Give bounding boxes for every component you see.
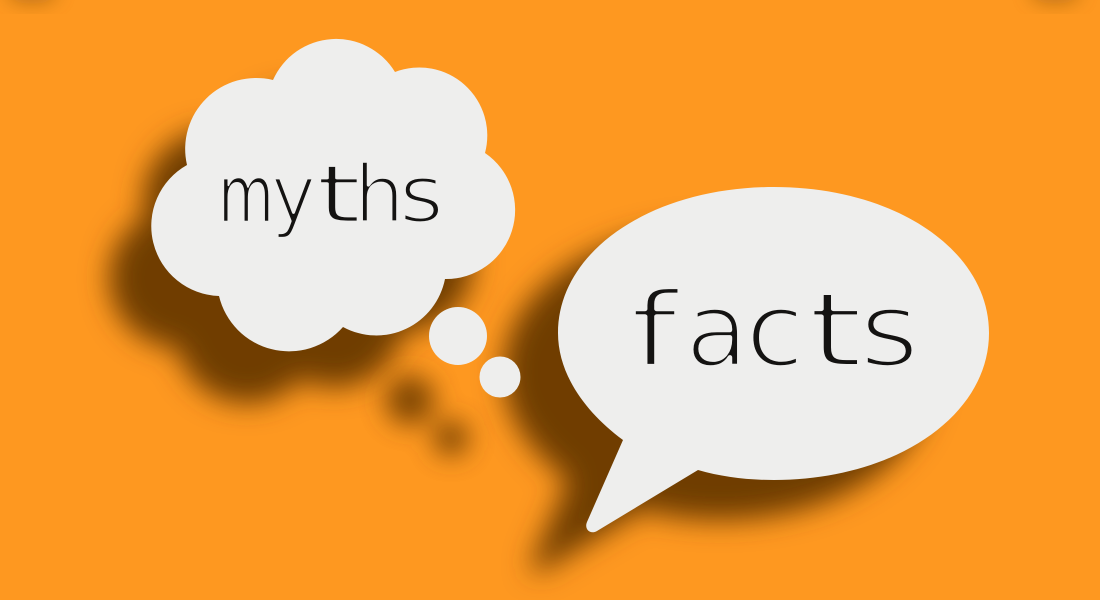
facts speech bubble: [558, 187, 989, 532]
myths label: [218, 148, 444, 242]
myths thought cloud: [151, 39, 515, 351]
myths label: y: [271, 149, 316, 241]
facts label: a: [685, 269, 749, 391]
myths label: m: [218, 149, 274, 242]
large thought dot: [429, 307, 487, 365]
cloud shape: [151, 39, 515, 351]
facts label: f: [630, 270, 680, 391]
myths label: s: [399, 148, 444, 241]
facts label: [630, 269, 920, 391]
speech bubble shape: [558, 187, 989, 532]
corner shadows: [6, 0, 1081, 4]
small thought dot: [480, 356, 520, 398]
myths label: t: [316, 149, 361, 241]
myths label: h: [354, 148, 405, 241]
cloud shadow: [109, 91, 473, 403]
speech bubble shadow: [503, 227, 934, 572]
facts label: c: [745, 270, 805, 391]
facts label: t: [808, 270, 863, 391]
small bubble shadows: [385, 375, 469, 456]
facts label: s: [859, 271, 920, 391]
